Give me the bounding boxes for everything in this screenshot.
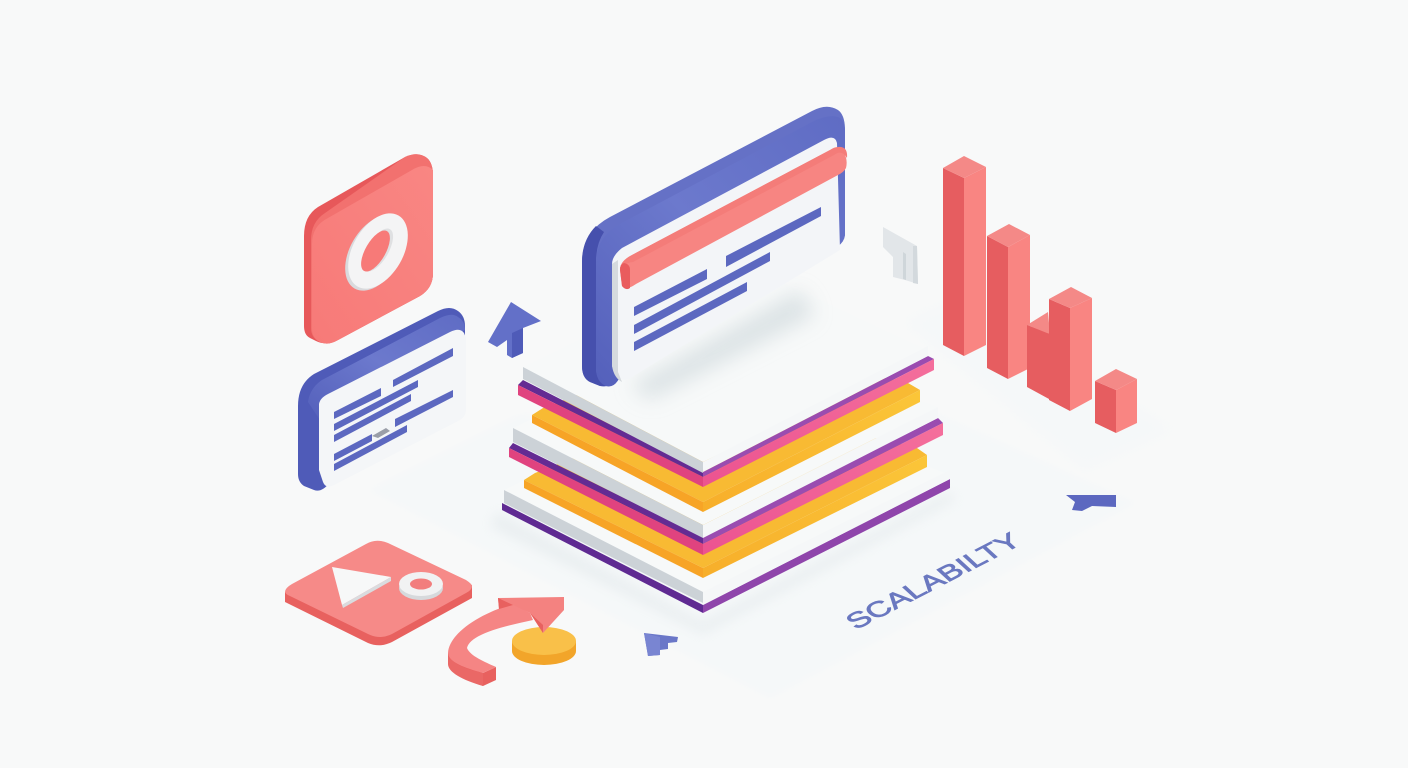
panel text lines xyxy=(634,207,821,351)
coral curved arrow xyxy=(448,597,564,686)
grey small t-shaped marker xyxy=(883,227,918,284)
small document panel xyxy=(298,308,466,491)
document text lines xyxy=(334,348,453,471)
stack soft shadow xyxy=(490,492,955,634)
bar 5 xyxy=(1095,369,1137,433)
coral app tile icon xyxy=(304,154,433,344)
white ring xyxy=(333,203,420,301)
layer: upper pink and purple slab xyxy=(518,356,934,487)
panel shadow on top slab xyxy=(630,290,815,400)
layer: top white slab xyxy=(523,262,930,473)
scalability label: SCALABILTY xyxy=(840,529,1027,634)
white triangle xyxy=(332,567,391,608)
small marker on text line xyxy=(372,428,390,438)
floor plane xyxy=(370,295,1172,698)
layered platform stack xyxy=(502,262,950,613)
bar 2 xyxy=(987,224,1030,379)
layer: lower pink and purple slab xyxy=(509,418,943,555)
layer: lower orange slab xyxy=(524,400,927,578)
bar 4 xyxy=(1049,287,1092,411)
document sheet xyxy=(319,330,466,487)
small ring xyxy=(399,572,443,600)
blue pointer right xyxy=(1066,495,1116,511)
coral play plate xyxy=(285,541,472,645)
panel back frame xyxy=(582,107,845,386)
bar 3 xyxy=(1027,312,1050,399)
panel coral header bar xyxy=(620,147,847,289)
layer: bottom purple base xyxy=(502,479,950,613)
blue up arrow xyxy=(488,302,541,358)
blue pointer near stack xyxy=(644,633,678,656)
bar 1 xyxy=(943,156,986,356)
panel white sheet xyxy=(612,138,840,380)
red bar chart xyxy=(943,156,1137,433)
layer: bottom white slab xyxy=(504,385,950,605)
gold coin xyxy=(512,627,576,665)
layer: middle white slab xyxy=(513,330,938,538)
main window panel xyxy=(582,107,847,386)
layer: upper orange slab xyxy=(532,340,920,512)
